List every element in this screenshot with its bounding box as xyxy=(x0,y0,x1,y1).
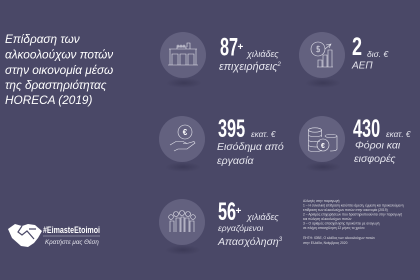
label: taxes unit: εκατ. € xyxy=(386,130,411,139)
label: income: Εισόδημα από xyxy=(217,141,284,153)
footnotes: σε πλήρη απασχόληση 12 μήνες το χρόνο xyxy=(303,226,365,230)
panel: income xyxy=(159,116,284,172)
title: HORECA (2019) xyxy=(5,93,92,107)
value: 2: 2 xyxy=(352,32,362,61)
label: taxes: Φόροι και xyxy=(355,140,401,152)
tagline: Κρατήστε μας Θέση xyxy=(45,239,99,246)
footnotes: Αλλαγές στην παραγωγή: xyxy=(303,199,340,203)
icon: hand holding euro coin: € xyxy=(183,128,188,137)
footnotes: ΠΗΓΗ: IOBE, Ο κλάδος των αλκοολούχων ποτών xyxy=(303,236,375,240)
footnotes: 1 – Η συνολική επίδραση καλύπτει άμεση, έμμεση και προκαλούμενη xyxy=(303,204,404,208)
label: employment unit: χιλιάδες xyxy=(246,212,279,222)
footnotes: επίδραση των αλκοολούχων ποτών στην οικονομία (2019) xyxy=(303,208,388,212)
label: GDP: ΑΕΠ xyxy=(351,60,373,72)
value: 87+: 87 xyxy=(220,34,238,61)
footnotes: 2 – Αριθμός επιχειρήσεων που δραστηριοποιούνται στην παραγωγή xyxy=(303,212,402,216)
footnotes: στην Ελλάδα, Νοέμβριος 2020 xyxy=(303,241,348,245)
panel: income: εργασία xyxy=(217,155,255,167)
icon: group of people xyxy=(169,210,195,232)
icon: factory xyxy=(168,43,198,65)
icon: handshake xyxy=(8,224,42,247)
footnotes xyxy=(303,199,404,245)
label: GDP unit: δισ. € xyxy=(367,49,389,59)
title: αλκοολούχων ποτών xyxy=(5,48,113,62)
value: 395: 395 xyxy=(218,116,245,143)
label: employment: Απασχόληση xyxy=(218,236,279,248)
title: στην οικονομία μέσω xyxy=(5,63,113,77)
value: 56+: 56 xyxy=(218,199,236,226)
panel: employment: + xyxy=(236,206,242,217)
label: employees: εργαζόμενοι xyxy=(218,223,263,233)
icon: coin stacks: € xyxy=(321,143,325,150)
title: της δραστηριότητας xyxy=(5,78,107,92)
panel: businesses xyxy=(160,32,282,88)
panel: taxes xyxy=(299,116,411,172)
panel: businesses: + xyxy=(238,42,244,53)
title xyxy=(5,32,113,107)
hashtag: #EimasteEtoimoi xyxy=(43,225,100,235)
panel: taxes: εισφορές xyxy=(354,153,396,165)
panel: GDP xyxy=(299,32,389,88)
footnotes: και πώληση αλκοολούχων ποτών xyxy=(303,217,352,221)
value: 430: 430 xyxy=(353,116,380,143)
label: employment: 3 xyxy=(279,237,283,243)
footnotes: 3 – Ο αριθμός απασχόλησης προκύπτει με αναγωγή xyxy=(303,222,380,226)
label: businesses: 2 xyxy=(276,62,282,68)
title: Επίδραση των xyxy=(5,32,80,46)
label: businesses: επιχειρήσεις xyxy=(219,61,278,73)
label: income unit: εκατ. € xyxy=(251,130,276,139)
panel: employment xyxy=(159,199,283,255)
logo: campaign xyxy=(8,224,100,247)
icon: coin and growth chart xyxy=(311,42,333,67)
label: businesses unit: χιλιάδες xyxy=(246,49,279,59)
